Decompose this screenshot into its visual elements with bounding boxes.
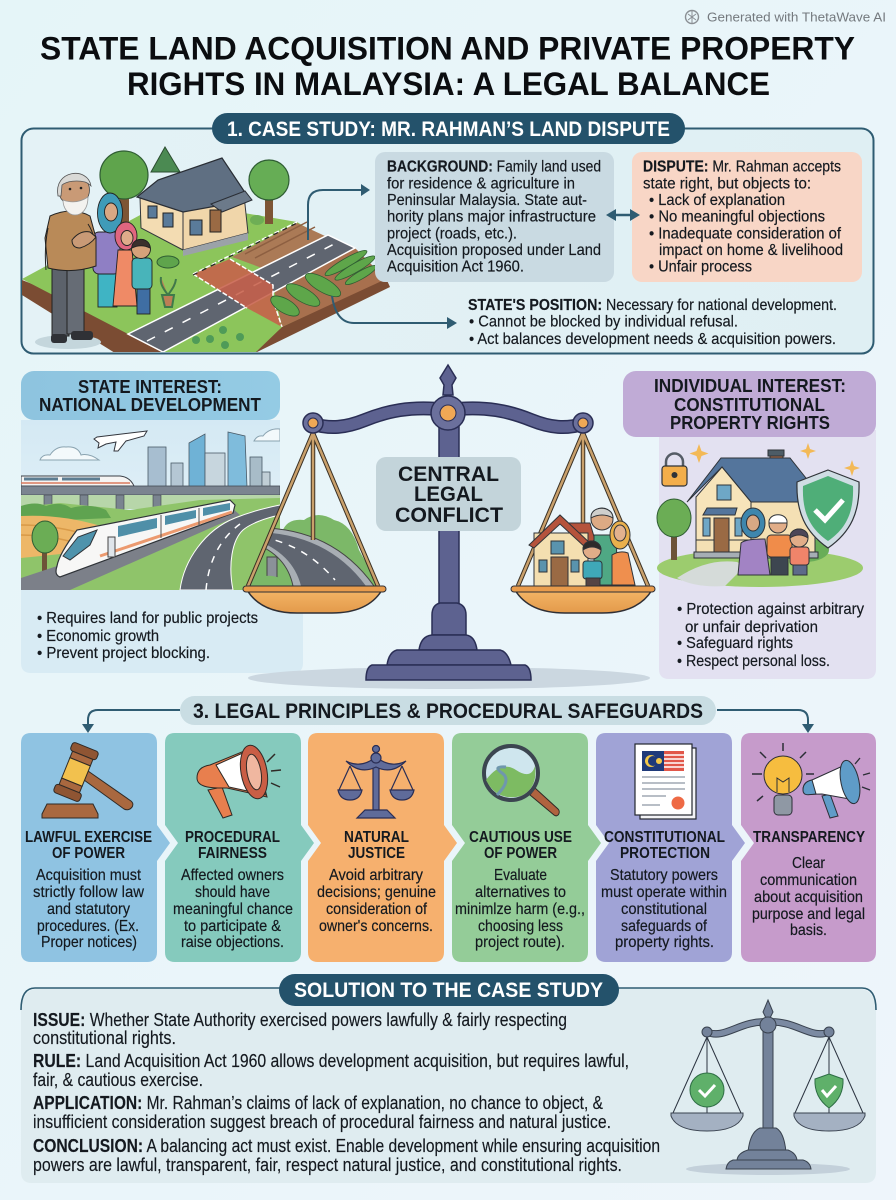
card: cautious use of power: choosing less <box>478 918 563 935</box>
card: constitutional protection <box>596 733 745 962</box>
card: lawful exercise of power: Proper notices) <box>41 934 137 951</box>
card: procedural fairness: should have <box>195 884 270 901</box>
icon: document with flag <box>635 744 696 819</box>
figures: family <box>738 508 809 575</box>
card: constitutional protection: safeguards of <box>621 918 708 935</box>
card: natural justice: NATURAL <box>344 829 409 846</box>
card: lawful exercise of power: and statutory <box>47 901 130 918</box>
figure: elderly man <box>35 173 101 349</box>
card: lawful exercise of power: strictly follow law <box>33 884 145 901</box>
heading: state interest: NATIONAL DEVELOPMENT <box>39 395 261 415</box>
card: natural justice: consideration of <box>326 901 428 918</box>
heading: case study: 1. CASE STUDY: MR. RAHMAN’S LAND DISPUTE <box>227 118 670 141</box>
icon: tree <box>657 499 691 560</box>
box: dispute: • Lack of explanation <box>649 192 785 209</box>
card: procedural fairness: raise objections. <box>181 934 284 951</box>
text: individual interest bullets: • Respect personal loss. <box>677 653 830 670</box>
card: natural justice: decisions; genuine <box>317 884 436 901</box>
heading: individual interest: INDIVIDUAL INTEREST: <box>654 376 846 396</box>
box: dispute: • No meaningful objections <box>649 209 825 226</box>
card: cautious use of power: OF POWER <box>484 845 557 862</box>
box: dispute <box>632 152 862 282</box>
right pan: home and family <box>511 413 655 613</box>
text: state interest bullets: • Economic growth <box>37 628 159 645</box>
card: constitutional protection: must operate within <box>601 884 727 901</box>
text: IRAC analysis: CONCLUSION: A balancing act must exist. Enable development while ensuring acquisition <box>33 1136 660 1156</box>
figure: boy <box>132 239 152 314</box>
illustration: protected home and family <box>657 443 863 587</box>
panel: individual interest <box>623 371 876 679</box>
icon: balanced scale <box>671 1000 865 1175</box>
text: IRAC analysis: RULE: Land Acquisition Act 1960 allows development acquisition, but requires lawful, <box>33 1051 629 1071</box>
card: natural justice: Avoid arbitrary <box>329 867 423 884</box>
heading: individual interest: PROPERTY RIGHTS <box>670 413 830 433</box>
skyline <box>148 432 270 487</box>
box: dispute: DISPUTE: Mr. Rahman accepts <box>643 159 841 176</box>
train: high speed <box>56 500 235 577</box>
box: background <box>375 152 614 282</box>
text: state position <box>468 297 837 348</box>
box: dispute: impact on home & livelihood <box>659 242 843 259</box>
box: background: for residence & agriculture in <box>387 175 575 192</box>
card: constitutional protection: property rights. <box>615 934 714 951</box>
icon: potted plant <box>161 277 176 307</box>
card: constitutional protection: constitutional <box>621 901 707 918</box>
balance scale: central legal conflict <box>243 365 655 689</box>
heading: solution: SOLUTION TO THE CASE STUDY <box>294 979 603 1002</box>
icon: megaphone <box>197 743 281 818</box>
card: cautious use of power: alternatives to <box>475 884 566 901</box>
figure: woman <box>93 193 122 307</box>
icon: trees behind house <box>99 146 290 224</box>
card: natural justice: owner's concerns. <box>319 918 433 935</box>
card: procedural fairness: Affected owners <box>181 867 284 884</box>
box: dispute: state right, but objects to: <box>643 175 811 192</box>
heading: case study <box>212 113 685 144</box>
figure: girl <box>113 222 137 306</box>
card: procedural fairness: PROCEDURAL <box>185 829 280 846</box>
text: individual interest bullets <box>677 601 864 670</box>
card: procedural fairness: meaningful chance <box>173 901 293 918</box>
illustration: family on land with road <box>22 147 390 353</box>
card: procedural fairness <box>165 733 314 962</box>
icon: light bulb and megaphone <box>752 743 870 818</box>
card: natural justice <box>308 733 457 962</box>
card: cautious use of power: Evaluate <box>494 867 547 884</box>
icon: house <box>137 158 264 256</box>
label: central legal conflict: LEGAL <box>414 483 483 506</box>
box: dispute: • Unfair process <box>649 259 752 276</box>
scale post and base <box>366 425 531 680</box>
box: dispute: • Inadequate consideration of <box>649 225 842 242</box>
heading: individual interest <box>623 371 876 437</box>
box: background: hority plans major infrastructure <box>387 209 596 226</box>
card: procedural fairness: to participate & <box>184 918 281 935</box>
icon: magnifying glass <box>484 746 559 816</box>
card: cautious use of power: minimlze harm (e.g., <box>455 901 585 918</box>
arrow: house to background <box>308 184 370 240</box>
card: procedural fairness: FAIRNESS <box>198 845 267 862</box>
text: state interest bullets: • Prevent project blocking. <box>37 645 210 662</box>
watermark: Generated with ThetaWave AI <box>707 10 886 24</box>
card: natural justice: JUSTICE <box>348 845 405 862</box>
label: central legal conflict: CENTRAL <box>398 463 499 486</box>
text: IRAC analysis: powers are lawful, transparent, fair, respect natural justice, and constitutional rights. <box>33 1155 622 1175</box>
text: IRAC analysis: constitutional rights. <box>33 1028 176 1048</box>
text: state position: • Act balances development needs & acquisition powers. <box>469 331 836 348</box>
card: transparency: Clear <box>792 855 825 872</box>
icon: scales <box>338 746 414 818</box>
card: lawful exercise of power: procedures. (Ex. <box>37 918 139 935</box>
card: transparency: purpose and legal <box>752 906 865 923</box>
arrow: double between boxes <box>606 209 640 221</box>
illustration: national development scene <box>21 420 280 590</box>
train: elevated <box>21 476 134 486</box>
label: central legal conflict <box>376 457 521 531</box>
heading: individual interest: CONSTITUTIONAL <box>674 395 825 415</box>
arrow: land to state position <box>332 296 457 329</box>
left pan: infrastructure <box>243 413 386 613</box>
panel: solution <box>21 974 876 1183</box>
card: constitutional protection: PROTECTION <box>620 845 710 862</box>
icon: padlock <box>662 454 687 486</box>
panel: case study <box>22 113 874 354</box>
heading: state interest: STATE INTEREST: <box>78 377 222 397</box>
card: cautious use of power <box>452 733 601 962</box>
title: STATE LAND ACQUISITION AND PRIVATE PROPERTY <box>40 30 855 66</box>
text: state interest bullets <box>37 610 258 662</box>
card: cautious use of power: project route). <box>475 934 565 951</box>
section: legal principles <box>21 696 876 962</box>
card: lawful exercise of power <box>21 733 170 962</box>
icon: sparkles <box>690 443 860 476</box>
box: background: BACKGROUND: Family land used <box>387 159 601 176</box>
icon: shield <box>797 470 859 548</box>
label: central legal conflict: CONFLICT <box>395 504 503 527</box>
box: background: Acquisition proposed under Land <box>387 242 601 259</box>
text: state position: STATE'S POSITION: Necessary for national development. <box>468 297 837 314</box>
rail <box>21 508 240 590</box>
heading: legal principles: 3. LEGAL PRINCIPLES & PROCEDURAL SAFEGUARDS <box>193 700 703 723</box>
heading: solution <box>279 974 619 1006</box>
text: IRAC analysis: fair, & cautious exercise. <box>33 1070 203 1090</box>
card: cautious use of power: CAUTIOUS USE <box>469 829 572 846</box>
card: transparency: communication <box>760 872 857 889</box>
box: background: Acquisition Act 1960. <box>387 259 524 276</box>
card: transparency: about acquisition <box>754 889 863 906</box>
text: individual interest bullets: • Protection against arbitrary <box>677 601 864 618</box>
text: IRAC analysis: insufficient consideration suggest breach of procedural fairness and natural justice. <box>33 1112 611 1132</box>
card: transparency: basis. <box>790 922 827 939</box>
icon: plane <box>94 431 147 451</box>
scale beam <box>313 365 583 430</box>
card: transparency: TRANSPARENCY <box>753 829 865 846</box>
title: RIGHTS IN MALAYSIA: A LEGAL BALANCE <box>127 66 770 102</box>
panel: state interest <box>21 371 303 673</box>
icon: gavel <box>42 742 133 818</box>
card: lawful exercise of power: LAWFUL EXERCISE <box>25 829 152 846</box>
heading: state interest <box>21 371 280 420</box>
box: background: Peninsular Malaysia. State aut- <box>387 192 587 209</box>
card: transparency <box>741 733 876 962</box>
card: constitutional protection: CONSTITUTIONAL <box>604 829 725 846</box>
text: IRAC analysis <box>33 1010 660 1175</box>
card: constitutional protection: Statutory powers <box>610 867 718 884</box>
title <box>40 30 855 102</box>
card: lawful exercise of power: Acquisition must <box>36 867 142 884</box>
road: highway <box>180 505 280 590</box>
box: background: project (roads, etc.). <box>387 225 517 242</box>
text: state position: • Cannot be blocked by individual refusal. <box>469 314 738 331</box>
arrow: to first card <box>82 710 180 733</box>
text: individual interest bullets: • Safeguard rights <box>677 635 793 652</box>
text: IRAC analysis: APPLICATION: Mr. Rahman’s claims of lack of explanation, no chance to object, & <box>33 1093 603 1113</box>
arrow: to last card <box>717 710 814 733</box>
text: state interest bullets: • Requires land for public projects <box>37 610 258 627</box>
text: individual interest bullets: or unfair deprivation <box>685 619 818 636</box>
icon: house <box>687 450 825 558</box>
card: lawful exercise of power: OF POWER <box>52 845 125 862</box>
text: IRAC analysis: ISSUE: Whether State Authority exercised powers lawfully & fairly respecting <box>33 1010 567 1030</box>
